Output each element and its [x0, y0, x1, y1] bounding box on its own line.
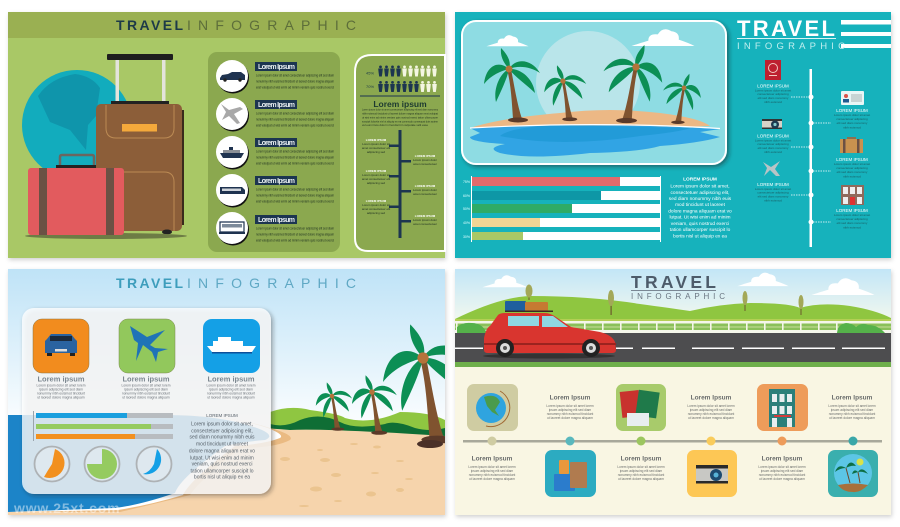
item: suitcase text: consectetuer adipiscing: [836, 166, 868, 170]
text block: upper 1: Lorem ipsum dolor sit amet lorem: [546, 404, 594, 408]
item: camera text: [755, 134, 791, 154]
timeline labels: amet consectetuer: [413, 162, 437, 166]
item: bus: Lorem ipsum dolor sit amet consectetuer adipiscing elit sed diam: [256, 188, 334, 192]
icon: camera: [762, 119, 782, 129]
icon: id card: [841, 91, 864, 105]
pie: green: [84, 446, 120, 482]
text block: lower 2: ut laoreet dolore magna aliquam: [618, 477, 664, 481]
text block: upper 3: Lorem Ipsum: [832, 394, 873, 402]
timeline labels: LOREM IPSUM: [366, 169, 387, 173]
timeline labels: amet consectetuer: [413, 222, 437, 226]
text block: lower 1: Lorem Ipsum: [472, 456, 513, 462]
item: train: erat volutpat ut wisi enim ad minim veniam quis nostrud exerci: [256, 238, 334, 242]
tile: luggage: [545, 450, 596, 497]
text block: upper 1: ipsum adipiscing elit sed diam: [549, 408, 592, 412]
timeline labels: adipiscing sed: [367, 150, 386, 154]
item: id text: elit sed diam nonummy: [837, 121, 868, 125]
item: passport text: [755, 84, 791, 104]
pie: blue: [136, 446, 172, 482]
card paragraph: lutpat. Ut wisi enim ad minim: [190, 456, 254, 462]
timeline labels: Lorem ipsum dolor sit: [362, 203, 390, 207]
caption: plane: ut laoreet dolore magna aliquam: [122, 396, 170, 400]
bushes: [457, 323, 885, 333]
panel: beach island: [455, 12, 891, 258]
pictogram row 70%: 70%: [366, 84, 374, 89]
timeline labels: LOREM IPSUM: [415, 214, 436, 218]
item: id text: [834, 108, 870, 130]
icon: plane: [763, 161, 780, 176]
item: car: erat volutpat ut wisi enim ad minim veniam quis nostrud exerci: [256, 86, 334, 90]
timeline labels: LOREM IPSUM: [415, 184, 436, 188]
bar chart text: Lorem ipsum dolor sit amet,: [670, 184, 730, 190]
timeline labels: Lorem ipsum dolor sit: [362, 142, 390, 146]
progress bars: [33, 411, 173, 441]
card paragraph: tation ullamcorper suscipit lo: [190, 468, 254, 474]
title: TRAVEL: [631, 272, 716, 292]
caption: plane: nonummy nibh euismod tincidunt: [122, 392, 170, 396]
red car: [483, 301, 616, 358]
bar chart text: dolore magna aliquam erat vo: [668, 208, 732, 214]
timeline labels: Lorem ipsum dolor sit: [362, 173, 390, 177]
caption: ship: Lorem ipsum: [207, 374, 255, 384]
text block: upper 3: [828, 394, 876, 420]
bar chart text: sed diam nonummy nibh euis: [669, 196, 732, 202]
tile: globe: [467, 384, 518, 431]
caption: car: nonummy nibh euismod tincidunt: [37, 392, 85, 396]
bar chart text: LOREM IPSUM: [683, 176, 717, 182]
item: plane text: LOREM IPSUM: [757, 182, 789, 187]
item: suitcase text: [834, 157, 870, 178]
text block: upper 1: Lorem Ipsum: [550, 394, 591, 402]
title: INFOGRAPHIC: [631, 292, 725, 301]
text block: upper 2: Lorem ipsum dolor sit amet lorem: [687, 404, 735, 408]
text block: lower 3: nonummy nibh euismod tincidunt: [759, 473, 805, 477]
bar chart text: mod tincidunt ut laoreet: [675, 202, 726, 208]
text block: lower 2: [617, 456, 665, 481]
item: ship: [216, 136, 334, 170]
bar chart text: veniam, quis nostrud exerci: [671, 221, 729, 227]
beach scene: [8, 269, 473, 515]
item: hotel text: Lorem ipsum dolor sit amet: [834, 213, 870, 217]
item: ship: erat volutpat ut wisi enim ad minim veniam quis nostrud exerci: [256, 162, 334, 166]
caption: ship: ipsum adipiscing elit sed diam: [209, 388, 253, 392]
bar chart: 60%: [463, 194, 470, 198]
translucent card: [22, 308, 271, 494]
item: car: Lorem ipsum dolor sit amet consectetuer adipiscing elit sed diam: [256, 74, 334, 78]
item: hotel text: nibh euismod: [843, 226, 861, 230]
panel: transport list: [208, 52, 340, 252]
panel: luggage: [8, 12, 445, 258]
header band: [8, 12, 445, 38]
paragraph: nibh euismod tincidunt ut laoreet dolore magna aliquam erat volutpat: [362, 112, 438, 116]
item: camera text: elit sed diam nonummy: [758, 146, 789, 150]
text block: upper 3: ipsum adipiscing elit sed diam: [831, 408, 874, 412]
paragraph: vel eum iriure dolor in hendrerit in vulputate velit esse: [362, 123, 428, 127]
item: id text: Lorem ipsum dolor sit amet: [834, 113, 870, 117]
pie: orange: [34, 446, 70, 482]
item: plane text: consectetuer adipiscing: [757, 190, 789, 194]
globe: [22, 70, 132, 180]
text block: upper 3: Lorem ipsum dolor sit amet lorem: [828, 404, 876, 408]
item: train: [216, 212, 334, 246]
bar chart text: consectetuer adipiscing elit,: [671, 190, 729, 196]
text block: lower 3: ut laoreet dolore magna aliquam: [759, 477, 805, 481]
item: plane: erat volutpat ut wisi enim ad minim veniam quis nostrud exerci: [256, 124, 334, 128]
item: passport text: nibh euismod: [764, 100, 782, 104]
item: camera text: consectetuer adipiscing: [757, 142, 789, 146]
road: [455, 333, 891, 367]
panel: road trip: [455, 269, 891, 515]
item: plane text: Lorem ipsum dolor sit amet: [755, 187, 791, 191]
icon tile: plane: [119, 319, 175, 373]
caption: car: [37, 374, 86, 400]
item: hotel text: elit sed diam nonummy: [837, 221, 868, 225]
timeline labels: LOREM IPSUM: [415, 154, 436, 158]
pictogram row 70%: [366, 81, 437, 92]
text block: lower 1: Lorem ipsum dolor sit amet lorem: [468, 465, 516, 469]
timeline labels: amet consectetuer elit: [362, 207, 390, 211]
ground shadow: [25, 233, 187, 239]
caption: plane: [122, 374, 171, 400]
title: INFOGRAPHIC: [187, 17, 356, 33]
item: bus: nonummy nibh euismod tincidunt ut laoreet dolore magna aliquam: [256, 194, 334, 198]
item: passport text: LOREM IPSUM: [757, 84, 789, 88]
text block: upper 3: ut laoreet dolore magna aliquam: [829, 416, 875, 420]
card paragraph: LOREM IPSUM: [206, 413, 238, 418]
item: hotel text: LOREM IPSUM: [836, 208, 868, 213]
card paragraph: veniam, quis nostrud exerci: [192, 462, 252, 468]
text block: upper 2: nonummy nibh euismod tincidunt: [688, 412, 734, 416]
tile: beach: [828, 450, 878, 497]
item: ship: Lorem ipsum dolor sit amet consectetuer adipiscing elit sed diam: [256, 150, 334, 154]
item: suitcase text: LOREM IPSUM: [836, 157, 868, 162]
bar chart: 75%: [463, 180, 470, 184]
text block: lower 1: [468, 456, 516, 481]
caption: ship: Lorem ipsum dolor sit amet lorem: [207, 384, 256, 388]
illustration card: [462, 21, 726, 164]
item: train: Lorem Ipsum: [258, 217, 295, 224]
text block: lower 1: ipsum adipiscing elit sed diam: [471, 469, 514, 473]
fence: [455, 321, 891, 333]
panel: statistics and timeline: [355, 55, 445, 251]
paragraph: Lorem ipsum dolor sit amet consectetuer adipiscing elit sed diam nonummy: [362, 108, 438, 112]
title: [737, 16, 845, 52]
item: car: [216, 60, 334, 94]
item: passport text: consectetuer adipiscing: [757, 92, 789, 96]
item: train: nonummy nibh euismod tincidunt ut laoreet dolore magna aliquam: [256, 232, 334, 236]
text block: upper 1: [546, 394, 594, 420]
item: id text: consectetuer adipiscing: [836, 117, 868, 121]
icon: hotel: [841, 185, 864, 205]
item: passport text: elit sed diam nonummy: [758, 96, 789, 100]
text block: upper 2: ut laoreet dolore magna aliquam: [688, 416, 734, 420]
caption: plane: ipsum adipiscing elit sed diam: [124, 388, 168, 392]
text block: upper 2: ipsum adipiscing elit sed diam: [690, 408, 733, 412]
item: car: Lorem Ipsum: [258, 64, 295, 71]
bar chart text: bortis nisl ut aliquip ex ea: [673, 234, 727, 240]
hills: [455, 284, 891, 323]
tile: passports: [616, 384, 666, 431]
item: plane: Lorem Ipsum: [258, 102, 295, 109]
bar chart text: lutpat. Ut wisi enim ad minim: [669, 214, 731, 220]
item: id text: nibh euismod: [843, 126, 861, 130]
card paragraph: bortis nisl ut aliquip ex ea: [194, 474, 250, 480]
watermark: www.25xt.com: [13, 500, 120, 516]
tile: hotel: [757, 384, 808, 431]
timeline labels: LOREM IPSUM: [366, 199, 387, 203]
text block: upper 1: nonummy nibh euismod tincidunt: [547, 412, 593, 416]
bar chart text: tation ullamcorper suscipit lo: [670, 227, 731, 233]
caption: plane: Lorem ipsum dolor sit amet lorem: [122, 384, 171, 388]
icon: suitcase: [840, 137, 863, 153]
icon tile: car: [33, 319, 89, 373]
card paragraph: [189, 413, 255, 480]
text block: lower 3: ipsum adipiscing elit sed diam: [761, 469, 804, 473]
item: id text: LOREM IPSUM: [836, 108, 868, 113]
item: suitcase text: elit sed diam nonummy: [837, 170, 868, 174]
brown suitcase: [96, 54, 184, 234]
text block: lower 2: nonummy nibh euismod tincidunt: [618, 473, 664, 477]
item: plane text: nibh euismod: [764, 198, 782, 202]
item: plane: [216, 98, 334, 132]
title: TRAVEL: [737, 16, 835, 41]
icon: passport: [765, 60, 781, 80]
caption: ship: [207, 374, 256, 400]
item: suitcase text: Lorem ipsum dolor sit amet: [834, 162, 870, 166]
text block: lower 3: Lorem Ipsum: [762, 456, 803, 462]
paragraph: suscipit lobortis nisl ut aliquip ex ea commodo consequat duis autem: [362, 120, 438, 124]
timeline labels: adipiscing sed: [367, 181, 386, 185]
item: camera text: Lorem ipsum dolor sit amet: [755, 138, 791, 142]
item: suitcase text: nibh euismod: [843, 174, 861, 178]
caption: plane: Lorem ipsum: [122, 374, 170, 384]
item: train: Lorem ipsum dolor sit amet consectetuer adipiscing elit sed diam: [256, 226, 334, 230]
item: car: nonummy nibh euismod tincidunt ut laoreet dolore magna aliquam: [256, 80, 334, 84]
text block: upper 1: ut laoreet dolore magna aliquam: [547, 416, 593, 420]
text block: lower 1: ut laoreet dolore magna aliquam: [469, 477, 515, 481]
caption: ship: ut laoreet dolore magna aliquam: [207, 396, 255, 400]
text block: lower 3: [758, 456, 806, 481]
item: camera text: nibh euismod: [764, 150, 782, 154]
bar chart: 50%: [463, 207, 470, 211]
clouds: [482, 273, 874, 295]
caption: car: Lorem ipsum: [37, 374, 85, 384]
text block: upper 3: nonummy nibh euismod tincidunt: [829, 412, 875, 416]
caption: ship: nonummy nibh euismod tincidunt: [207, 392, 255, 396]
timeline labels: [362, 138, 437, 226]
bar chart: 30%: [463, 235, 470, 239]
timeline labels: adipiscing sed: [367, 211, 386, 215]
item: bus: erat volutpat ut wisi enim ad minim veniam quis nostrud exerci: [256, 200, 334, 204]
item: hotel text: consectetuer adipiscing: [836, 217, 868, 221]
item: plane text: elit sed diam nonummy: [758, 194, 789, 198]
bar chart: 40%: [463, 221, 470, 225]
item: plane: Lorem ipsum dolor sit amet consectetuer adipiscing elit sed diam: [256, 112, 334, 116]
caption: car: ipsum adipiscing elit sed diam: [39, 388, 83, 392]
card paragraph: sed diam nonummy nibh euis: [189, 434, 255, 440]
title: INFOGRAPHIC: [187, 275, 356, 291]
pictogram row 45%: [366, 66, 437, 76]
text block: lower 1: nonummy nibh euismod tincidunt: [469, 473, 515, 477]
item: plane: nonummy nibh euismod tincidunt ut laoreet dolore magna aliquam: [256, 118, 334, 122]
item: bus: Lorem Ipsum: [258, 178, 295, 185]
item: ship: nonummy nibh euismod tincidunt ut laoreet dolore magna aliquam: [256, 156, 334, 160]
caption: car: ut laoreet dolore magna aliquam: [37, 396, 85, 400]
text block: lower 2: ipsum adipiscing elit sed diam: [620, 469, 663, 473]
timeline labels: amet consectetuer elit: [362, 177, 390, 181]
paragraph: [362, 108, 438, 127]
title: INFOGRAPHIC: [737, 41, 845, 52]
timeline labels: Lorem ipsum dolor: [413, 188, 437, 192]
vertical timeline: [389, 130, 411, 238]
central timeline: [791, 69, 831, 247]
bar chart text: [668, 176, 732, 240]
card paragraph: mod tincidunt ut laoreet: [196, 442, 249, 448]
card paragraph: consectetuer adipiscing elit,: [191, 428, 253, 434]
card paragraph: dolore magna aliquam erat vo: [189, 448, 255, 454]
text block: lower 2: Lorem Ipsum: [621, 456, 662, 462]
paragraph: ut wisi enim ad minim veniam quis nostrud exerci tation ullamcorper: [362, 116, 438, 120]
text block: upper 2: Lorem Ipsum: [691, 394, 732, 402]
item: camera text: LOREM IPSUM: [757, 134, 789, 138]
item: ship: Lorem Ipsum: [258, 140, 295, 147]
panel: beach transport: [8, 269, 473, 516]
title: [631, 272, 725, 301]
header stripes: [841, 20, 891, 48]
item: bus: [216, 174, 334, 208]
timeline labels: amet consectetuer: [413, 192, 437, 196]
item: plane text: [755, 182, 791, 202]
item: passport text: Lorem ipsum dolor sit amet: [755, 88, 791, 92]
timeline labels: amet consectetuer elit: [362, 146, 390, 150]
sky: [455, 269, 891, 323]
text block: upper 2: [687, 394, 735, 420]
bar chart: [463, 176, 661, 242]
heading: Lorem ipsum: [373, 99, 427, 109]
title: TRAVEL: [116, 17, 183, 33]
text block: lower 2: Lorem ipsum dolor sit amet lorem: [617, 465, 665, 469]
text block: lower 3: Lorem ipsum dolor sit amet lorem: [758, 465, 806, 469]
pictogram row 45%: 45%: [366, 70, 374, 76]
item: hotel text: [834, 208, 870, 230]
caption: car: Lorem ipsum dolor sit amet lorem: [37, 384, 86, 388]
card paragraph: Lorem ipsum dolor sit amet,: [191, 422, 253, 428]
title: TRAVEL: [116, 275, 183, 291]
red suitcase: [28, 155, 124, 235]
timeline: [463, 436, 882, 446]
timeline labels: Lorem ipsum dolor: [413, 218, 437, 222]
timeline labels: LOREM IPSUM: [366, 138, 387, 142]
tile: camera: [687, 450, 737, 497]
icon tile: ship: [203, 319, 260, 373]
timeline labels: Lorem ipsum dolor: [413, 158, 437, 162]
